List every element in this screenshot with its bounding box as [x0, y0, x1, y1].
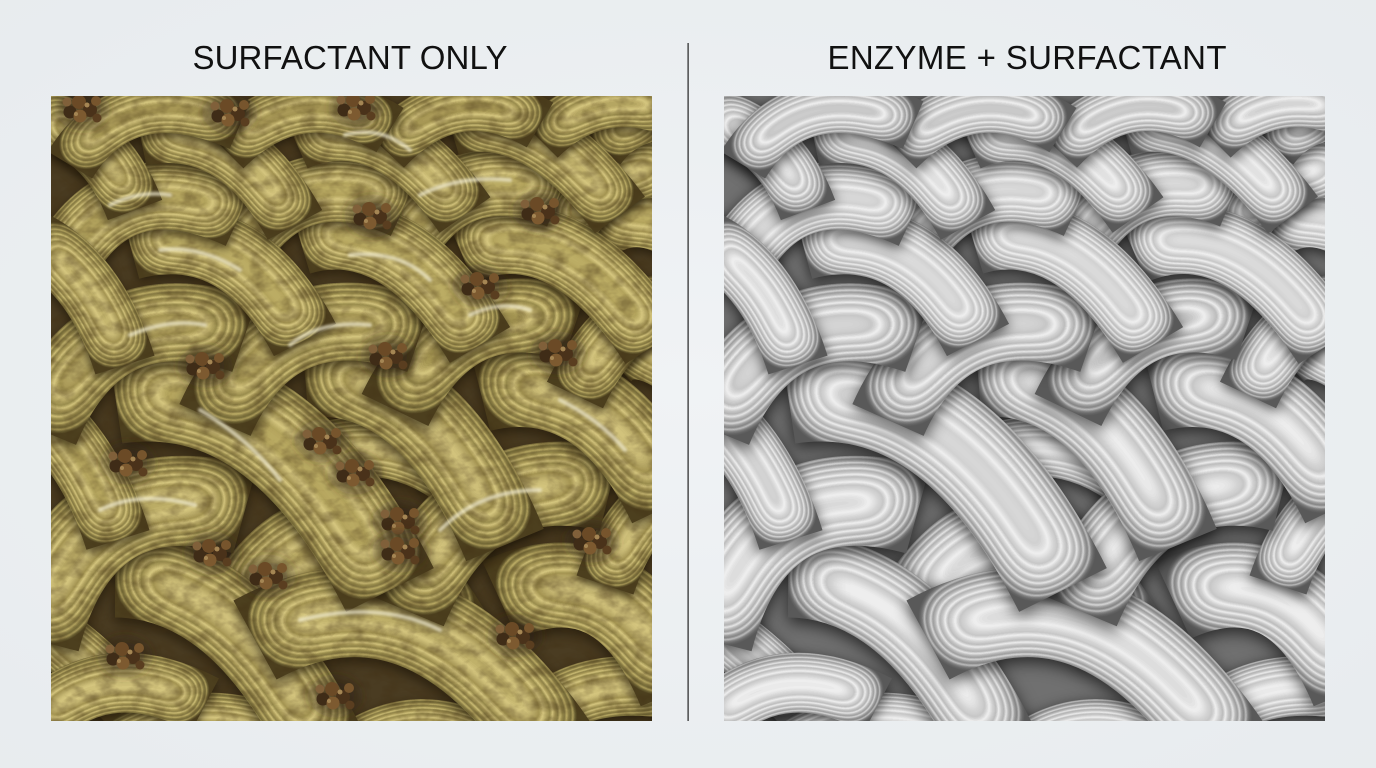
clean strands	[724, 96, 1325, 721]
soiled strands	[51, 96, 652, 721]
vertical divider	[688, 43, 689, 721]
panel: clean fabric weave, enzyme + surfactant	[724, 96, 1325, 721]
mottled soil film	[51, 96, 652, 721]
heading: surfactant only: SURFACTANT ONLY	[192, 39, 508, 76]
panel: soiled fabric weave, surfactant only	[51, 96, 652, 721]
glossy residue highlights	[100, 132, 625, 630]
dirt clumps	[58, 89, 616, 714]
heading: enzyme + surfactant: ENZYME + SURFACTANT	[828, 39, 1226, 76]
